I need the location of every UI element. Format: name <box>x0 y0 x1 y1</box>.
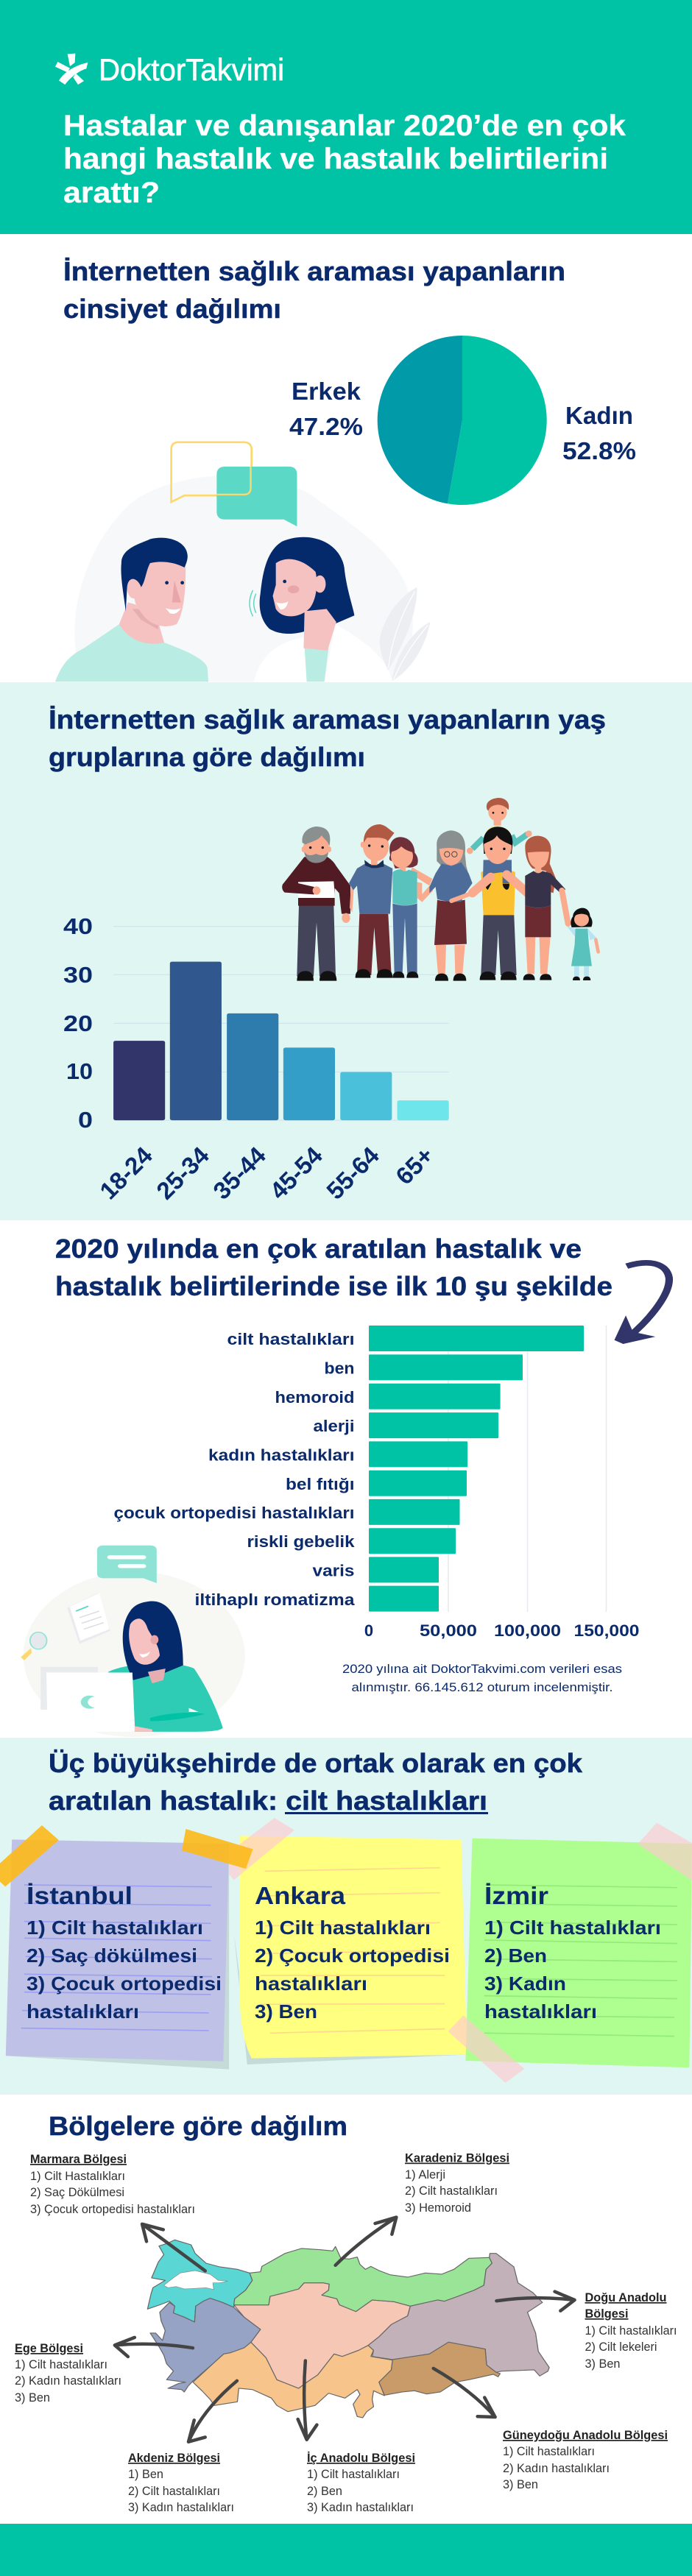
y axis labels: 40 <box>63 913 93 939</box>
label: Dogu Anadolu <box>585 2290 677 2371</box>
main title: arattı? <box>63 177 160 209</box>
bar labels: çocuk ortopedisi hastalıkları <box>113 1504 355 1522</box>
label: Ic Anadolu <box>307 2451 415 2514</box>
label: Ege: 3) Ben <box>15 2391 50 2405</box>
laptop <box>40 1667 152 1732</box>
logo star icon <box>55 54 88 85</box>
chat bubble icon <box>97 1546 157 1583</box>
arrow: Dogu Anadolu <box>496 2292 575 2311</box>
gender heading: İnternetten sağlık araması yapanların <box>63 256 565 286</box>
label: Ege: 2) Kadın hastalıkları <box>15 2374 121 2388</box>
label: Dogu Anadolu: Doğu Anadolu <box>585 2290 667 2304</box>
note: Izmir paper <box>465 1839 692 2067</box>
label: Dogu Anadolu: 3) Ben <box>585 2357 620 2371</box>
value axis labels: 50,000 <box>420 1621 477 1640</box>
text: Istanbul note: İstanbul <box>27 1882 133 1909</box>
little girl <box>567 908 599 980</box>
woman figure <box>108 1601 223 1732</box>
label: Ic Anadolu: 1) Cilt hastalıkları <box>307 2467 400 2481</box>
label: Dogu Anadolu: 2) Cilt lekeleri <box>585 2340 657 2354</box>
arrow: Marmara <box>142 2224 205 2271</box>
age bar chart <box>63 913 449 1205</box>
text: Ankara note: hastalıkları <box>255 1972 367 1995</box>
panel: gender distribution <box>55 256 636 682</box>
label: Kadın: Kadın <box>565 402 633 429</box>
regions heading: Bölgelere göre dağılım <box>49 2111 347 2141</box>
region: Karadeniz <box>234 2246 492 2312</box>
label: Erkek: 47.2% <box>289 413 363 440</box>
text: Istanbul note: 3) Çocuk ortopedisi <box>27 1972 222 1995</box>
data source note <box>342 1662 622 1694</box>
bar labels: hemoroid <box>275 1388 355 1406</box>
leaves <box>380 587 431 681</box>
label: Karadeniz: Karadeniz Bölgesi <box>405 2151 509 2165</box>
bar labels: alerji <box>314 1417 355 1435</box>
label: Guneydogu Anadolu <box>503 2428 668 2491</box>
label: Akdeniz: Akdeniz Bölgesi <box>128 2451 220 2465</box>
panel: top 10 searched conditions <box>21 1234 669 1737</box>
y axis labels: 10 <box>66 1058 93 1084</box>
label: Ege <box>15 2341 121 2405</box>
label: Marmara: 1) Cilt Hastalıkları <box>30 2169 125 2183</box>
label: Erkek: Erkek <box>292 378 361 405</box>
x axis labels: 25-34 <box>151 1141 214 1205</box>
data source note: 2020 yılına ait DoktorTakvimi.com verileri esas <box>342 1662 622 1676</box>
cities heading <box>49 1748 583 1816</box>
label: Marmara: 2) Saç Dökülmesi <box>30 2185 124 2199</box>
panel: three metropolitan cities <box>0 1738 692 2095</box>
label: Kadın: 52.8% <box>562 437 636 464</box>
label: Karadeniz <box>405 2151 509 2215</box>
value axis labels: 0 <box>364 1621 373 1640</box>
text: Ankara note: Ankara <box>255 1882 346 1909</box>
y axis labels: 30 <box>63 962 93 988</box>
label: Ic Anadolu: 2) Ben <box>307 2484 342 2498</box>
arrow: Ic Anadolu <box>298 2360 317 2440</box>
label: Guneydogu Anadolu: Güneydoğu Anadolu Bölgesi <box>503 2428 668 2442</box>
label: Dogu Anadolu: 1) Cilt hastalıkları <box>585 2324 677 2338</box>
label: Karadeniz: 1) Alerji <box>405 2168 445 2182</box>
x axis labels: 65+ <box>390 1142 439 1190</box>
gender heading: cinsiyet dağılımı <box>63 294 281 324</box>
text: Izmir note: 2) Ben <box>484 1945 547 1967</box>
man in blue shirt <box>349 824 395 978</box>
text: Izmir note <box>484 1882 661 2023</box>
cities heading: Üç büyükşehirde de ortak olarak en çok <box>49 1748 583 1778</box>
bar labels: ben <box>324 1359 355 1378</box>
note: Istanbul paper <box>6 1839 229 2070</box>
label: Guneydogu Anadolu: 3) Ben <box>503 2477 538 2491</box>
text: Istanbul note: 1) Cilt hastalıkları <box>27 1917 203 1939</box>
text: Ankara note: 3) Ben <box>255 2000 317 2023</box>
x axis labels: 55-64 <box>321 1141 384 1205</box>
grandmother <box>429 830 473 981</box>
man figure <box>55 538 208 682</box>
y axis labels: 0 <box>78 1107 93 1133</box>
x axis labels: 45-54 <box>264 1141 328 1205</box>
panel: regional distribution <box>15 2111 677 2514</box>
tape strips <box>0 1818 692 2083</box>
text: Izmir note: 3) Kadın <box>484 1972 566 1995</box>
note: Ankara paper <box>234 1836 467 2064</box>
illustration: two people talking <box>55 442 431 682</box>
text: Ankara note: 1) Cilt hastalıkları <box>255 1917 431 1939</box>
label: Akdeniz: 2) Cilt hastalıkları <box>128 2484 220 2498</box>
label: Akdeniz: 3) Kadın hastalıkları <box>128 2500 234 2514</box>
label: Ege: 1) Cilt hastalıkları <box>15 2357 107 2371</box>
map of Turkey <box>147 2240 549 2418</box>
main title: hangi hastalık ve hastalık belirtilerini <box>63 143 608 175</box>
magnifier icon <box>21 1632 47 1660</box>
arrow: pointing to chart <box>615 1263 669 1344</box>
label: Karadeniz: 2) Cilt hastalıkları <box>405 2184 498 2198</box>
region: Dogu Anadolu <box>368 2254 549 2376</box>
text: Izmir note: 1) Cilt hastalıkları <box>484 1917 661 1939</box>
label: Marmara <box>30 2152 195 2216</box>
father carrying child <box>451 798 532 980</box>
value axis labels <box>364 1621 639 1640</box>
text: Istanbul note <box>27 1882 222 2023</box>
main title <box>63 110 626 209</box>
speech bubble filled <box>216 467 297 526</box>
pie chart <box>378 336 547 505</box>
x axis labels <box>94 1141 439 1205</box>
top 10 heading <box>55 1234 612 1301</box>
value axis labels: 100,000 <box>494 1621 561 1640</box>
age heading: gruplarına göre dağılımı <box>49 742 365 772</box>
speech bubble outline <box>172 442 252 502</box>
bar labels: varis <box>312 1562 355 1579</box>
label: Guneydogu Anadolu: 2) Kadın hastalıkları <box>503 2461 610 2475</box>
label: Kadın <box>562 402 636 464</box>
text: Istanbul note: hastalıkları <box>27 2000 139 2023</box>
far arm of teal woman <box>410 867 432 885</box>
sticky notes and tape shapes <box>0 1818 692 2083</box>
bar labels: cilt hastalıkları <box>227 1330 355 1348</box>
label: Erkek <box>289 378 363 440</box>
label: Akdeniz <box>128 2451 234 2514</box>
arrow: Karadeniz <box>336 2218 396 2265</box>
x axis labels: 18-24 <box>94 1141 158 1205</box>
region: Akdeniz <box>193 2342 392 2418</box>
panel: header <box>0 0 692 234</box>
text: Izmir note: İzmir <box>484 1882 548 1909</box>
text: Istanbul note: 2) Saç dökülmesi <box>27 1945 197 1967</box>
label: Ic Anadolu: 3) Kadın hastalıkları <box>307 2500 414 2514</box>
arrow: Ege <box>115 2338 193 2357</box>
arrow: Guneydogu <box>434 2368 495 2417</box>
x axis labels: 35-44 <box>208 1141 271 1205</box>
cities heading: aratılan hastalık: cilt hastalıkları <box>49 1786 487 1816</box>
bar labels <box>113 1330 355 1609</box>
bar labels: kadın hastalıkları <box>208 1446 355 1465</box>
label: Akdeniz: 1) Ben <box>128 2467 163 2481</box>
bar labels: bel fıtığı <box>286 1475 355 1493</box>
data source note: alınmıştır. 66.145.612 oturum incelenmiştir. <box>352 1680 612 1694</box>
gender heading <box>63 256 565 324</box>
illustration: family group <box>282 798 599 981</box>
bar labels: iltihaplı romatizma <box>194 1590 355 1609</box>
document icon <box>67 1593 110 1644</box>
woman in teal top <box>389 837 433 978</box>
label: Ege: Ege Bölgesi <box>15 2341 83 2355</box>
arrow: Akdeniz <box>188 2381 237 2442</box>
text: Izmir note: hastalıkları <box>484 2000 597 2023</box>
illustration: woman at laptop <box>21 1546 245 1737</box>
top 10 heading: 2020 yılında en çok aratılan hastalık ve <box>55 1234 582 1264</box>
label: Marmara: 3) Çocuk ortopedisi hastalıkları <box>30 2202 195 2216</box>
footer band <box>0 2524 692 2576</box>
value axis labels: 150,000 <box>574 1621 639 1640</box>
horizontal bar chart <box>113 1326 639 1640</box>
label: Guneydogu Anadolu: 1) Cilt hastalıkları <box>503 2444 595 2458</box>
panel: age distribution <box>0 682 692 1220</box>
text: Ankara note <box>255 1882 450 2023</box>
woman in dark top <box>523 836 568 980</box>
label: Ic Anadolu: İç Anadolu Bölgesi <box>307 2451 415 2465</box>
label: Dogu Anadolu: Bölgesi <box>585 2307 629 2321</box>
region: Ic Anadolu <box>234 2283 410 2388</box>
label: Marmara: Marmara Bölgesi <box>30 2152 127 2166</box>
bar labels: riskli gebelik <box>247 1532 355 1551</box>
age heading: İnternetten sağlık araması yapanların yaş <box>49 704 606 735</box>
grandfather <box>282 827 350 981</box>
top 10 heading: hastalık belirtilerinde ise ilk 10 şu şekilde <box>55 1271 612 1301</box>
label: Karadeniz: 3) Hemoroid <box>405 2201 471 2215</box>
age heading <box>49 704 606 772</box>
region: Guneydogu Anadolu <box>379 2342 501 2395</box>
text: Ankara note: 2) Çocuk ortopedisi <box>255 1945 450 1967</box>
main title: Hastalar ve danışanlar 2020’de en çok <box>63 110 626 142</box>
region: Marmara <box>147 2240 253 2322</box>
woman figure <box>250 537 392 682</box>
logo wordmark: DoktorTakvimi <box>99 52 284 87</box>
y axis labels: 20 <box>63 1011 93 1036</box>
region: Ege <box>150 2299 261 2392</box>
y axis labels <box>63 913 93 1133</box>
arrows from map to labels <box>115 2218 575 2442</box>
